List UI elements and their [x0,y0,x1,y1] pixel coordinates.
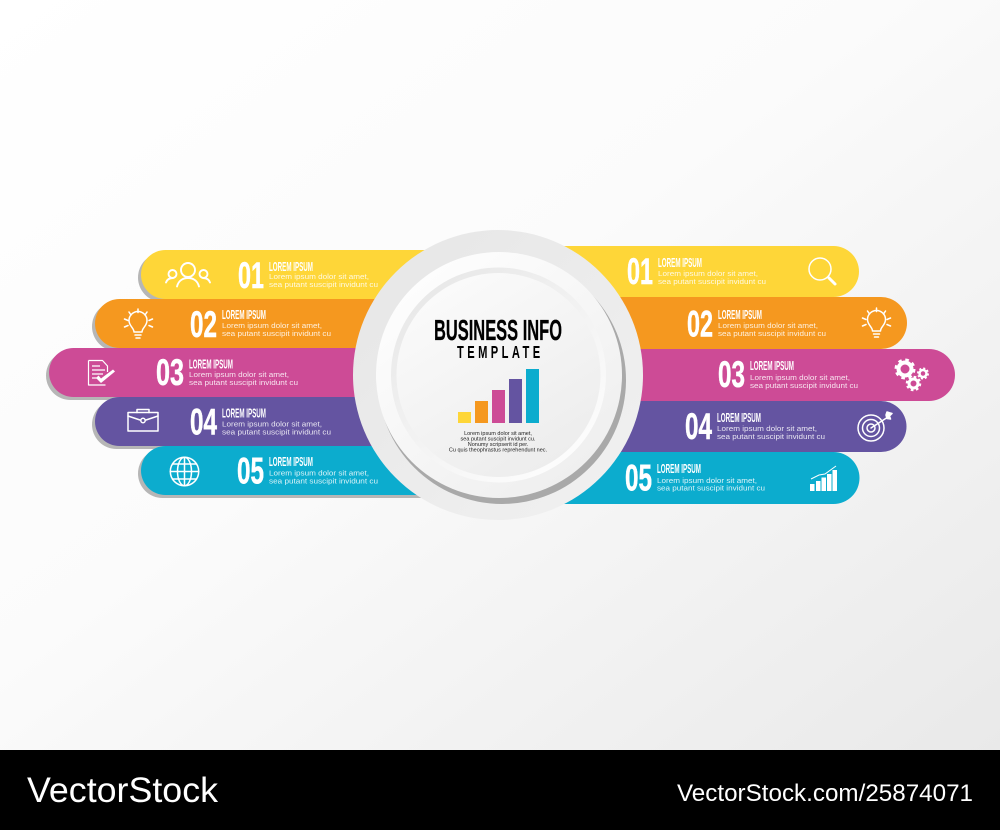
inner bevel [391,268,606,482]
left bar 02 orange [95,299,400,348]
outer ring [353,230,643,520]
number 03: 03 [156,352,184,393]
heading and text: LOREM IPSUM [750,359,794,373]
heading and text [718,308,826,338]
bar chart [458,369,539,423]
heading and text: LOREM IPSUM [658,256,702,270]
heading and text: sea putant suscipit invidunt cu [658,277,766,286]
right bar 02 orange [590,297,907,349]
heading and text [269,455,378,486]
left bar 01 yellow [141,250,430,299]
heading and text: LOREM IPSUM [657,462,701,476]
number 02: 02 [190,304,217,345]
number 04: 04 [685,406,712,447]
heading and text: sea putant suscipit invidunt cu [269,280,378,289]
icon: globe [170,457,199,486]
plate [376,252,622,498]
heading and text [269,260,378,289]
heading and text: LOREM IPSUM [269,455,313,469]
heading and text [657,462,765,492]
icon: briefcase [128,410,158,431]
footer logo: VectorStock [27,770,218,810]
number 04: 04 [190,402,217,442]
heading and text: Lorem ipsum dolor sit amet, [717,424,817,433]
heading and text: LOREM IPSUM [269,260,313,274]
icon: gears [896,360,928,390]
left bar 04 purple [95,397,400,446]
icon: light bulb [862,308,890,337]
number 02: 02 [687,304,713,344]
heading and text: Lorem ipsum dolor sit amet, [189,370,289,379]
heading and text [750,359,858,390]
heading and text: sea putant suscipit invidunt cu [718,329,826,338]
heading and text: Lorem ipsum dolor sit amet, [750,373,850,382]
heading and text [717,411,825,441]
panel: right bars [560,246,955,504]
heading and text: LOREM IPSUM [718,308,762,322]
heading and text: LOREM IPSUM [222,406,266,420]
heading and text: sea putant suscipit invidunt cu [222,329,331,338]
icon: document with check [88,360,115,385]
heading and text: Lorem ipsum dolor sit amet, [718,321,818,330]
heading and text: sea putant suscipit invidunt cu [269,476,378,486]
heading and text: sea putant suscipit invidunt cu [750,381,858,390]
heading and text: Lorem ipsum dolor sit amet, [657,476,757,485]
number 01: 01 [238,255,264,296]
right bar 01 yellow [560,246,859,297]
heading and text: Lorem ipsum dolor sit amet, [658,269,758,278]
icon: growth chart [810,466,837,491]
icon: light bulb [124,309,152,338]
icon: magnifier [809,258,835,284]
right bar 04 purple [590,401,907,452]
heading and text: Lorem ipsum dolor sit amet, [222,321,322,330]
left bar 03 magenta [49,348,380,397]
number 05: 05 [237,450,264,492]
plate shadow [378,256,626,504]
left bar 05 blue [141,446,430,495]
footer band [0,750,1000,830]
left bar shadows [46,253,430,498]
icon: people [166,263,210,286]
subtitle: TEMPLATE [457,342,544,363]
title: BUSINESS INFO [434,315,562,347]
right bar 05 blue [560,452,860,504]
heading and text: sea putant suscipit invidunt cu [189,378,298,387]
heading and text [189,358,298,387]
number 03: 03 [718,354,745,395]
heading and text: Lorem ipsum dolor sit amet, [222,420,322,428]
description text: Cu quis theophrastus reprehendunt nec. [449,448,548,454]
panel: central circle [353,230,643,520]
inner disc [396,273,600,477]
heading and text [658,256,766,286]
heading and text [222,406,331,436]
footer url: VectorStock.com/25874071 [677,780,973,807]
number 01: 01 [627,251,653,292]
heading and text: sea putant suscipit invidunt cu [717,432,825,441]
heading and text: Lorem ipsum dolor sit amet, [269,468,369,478]
heading and text: LOREM IPSUM [717,411,761,425]
panel: left bars [46,250,430,498]
number 05: 05 [625,458,652,498]
description text: Lorem ipsum dolor sit amet, [464,431,532,437]
heading and text: sea putant suscipit invidunt cu [657,484,765,492]
heading and text: LOREM IPSUM [222,308,266,322]
icon: target [858,412,892,441]
heading and text: Lorem ipsum dolor sit amet, [269,272,369,281]
description text: Nonumy scripserit id per. [468,442,529,448]
right bar 03 magenta [620,349,955,401]
heading and text: sea putant suscipit invidunt cu [222,428,331,436]
heading and text [222,308,331,338]
description text: sea putant suscipit invidunt cu. [461,436,536,442]
description text [449,431,548,454]
heading and text: LOREM IPSUM [189,358,233,372]
